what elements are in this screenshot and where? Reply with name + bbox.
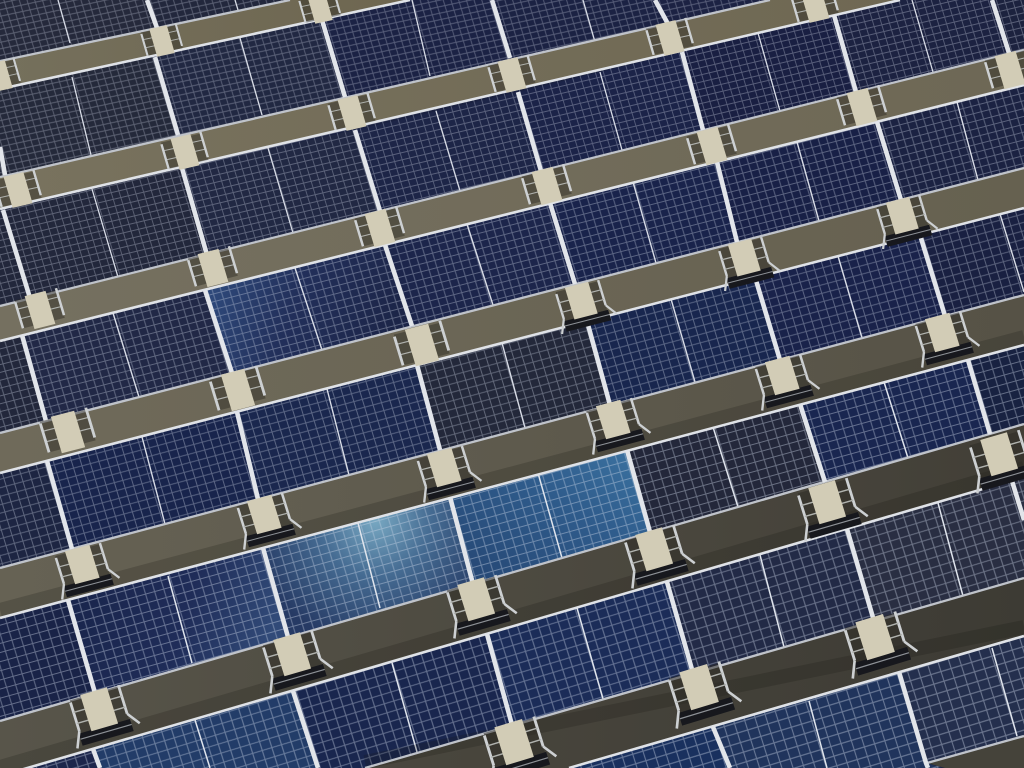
bracket	[686, 124, 738, 168]
bracket	[549, 277, 618, 334]
bracket	[0, 58, 22, 94]
panel r1 c3	[492, 0, 668, 58]
panel r6 c0	[93, 691, 318, 768]
panel r2 c5	[834, 0, 1009, 92]
bracket	[836, 85, 888, 129]
bracket	[187, 246, 239, 290]
bracket	[837, 608, 920, 679]
panel r4 c4	[755, 235, 945, 360]
ground gap G	[927, 736, 1024, 768]
ground gap E	[0, 424, 1024, 768]
panel row 0	[0, 0, 290, 61]
panel r3 c5	[877, 85, 1024, 200]
panel r2 c0	[3, 168, 207, 298]
bracket	[962, 426, 1024, 493]
panel r0 left	[0, 0, 157, 61]
bracket	[161, 132, 209, 172]
bracket	[521, 164, 573, 208]
panel r6 c2	[487, 582, 693, 725]
bracket	[791, 0, 839, 25]
bracket	[328, 93, 376, 133]
panel r5 c5	[968, 345, 1024, 434]
panel row 2	[0, 0, 1024, 306]
bracket	[49, 540, 121, 600]
panel row 4	[0, 208, 1024, 568]
ground gap D	[0, 295, 1024, 618]
panel r7 left	[571, 727, 730, 768]
panel r5 c0	[68, 548, 288, 693]
cell split lines r2	[92, 0, 933, 277]
ground gap T	[0, 0, 410, 89]
panel r0 right	[147, 0, 290, 28]
bracket	[580, 395, 652, 455]
panel r2 c3	[518, 52, 703, 171]
panel r5 left	[0, 600, 95, 721]
bracket	[14, 288, 66, 332]
bracket	[298, 0, 342, 26]
bracket	[411, 443, 483, 503]
panel r2 c6	[992, 0, 1024, 53]
bracket	[354, 206, 406, 250]
panel r4 c0	[47, 412, 258, 549]
ground gap A	[0, 0, 900, 209]
bracket	[0, 170, 42, 210]
panel r4 c2	[417, 321, 610, 450]
bracket	[255, 626, 335, 693]
bracket row F	[476, 608, 920, 768]
bracket	[749, 351, 821, 411]
panel r4 left	[0, 461, 72, 568]
panel r4 c1	[237, 365, 440, 499]
ground gap F	[365, 578, 1024, 768]
bracket	[870, 192, 939, 249]
panel r1 c4	[655, 0, 770, 24]
panel r3 c3	[550, 162, 737, 284]
bracket	[439, 572, 519, 638]
panel r7 c3	[713, 672, 942, 768]
bracket	[661, 658, 744, 729]
panel r5 c3	[627, 404, 825, 532]
bracket	[909, 308, 981, 368]
bracket row A	[0, 0, 839, 210]
panel r2 c2	[355, 92, 541, 211]
panel r2 c1	[182, 130, 380, 255]
panel r1 c1	[155, 20, 345, 135]
cell split lines r4	[142, 214, 1024, 524]
bracket row E	[62, 426, 1024, 748]
bracket row T	[0, 0, 342, 94]
ground gap C	[0, 168, 1024, 473]
panel r3 left	[0, 335, 46, 433]
cell split lines r6	[195, 503, 963, 768]
cell split lines r5	[168, 382, 908, 663]
panel r6 c3	[667, 529, 874, 673]
panel row 6	[0, 477, 1024, 768]
cell split lines r1	[72, 0, 595, 155]
panel r3 c0	[22, 290, 232, 421]
panel r3 c1 lit	[205, 245, 412, 373]
bracket	[646, 18, 694, 58]
bracket	[488, 55, 536, 95]
cell grid r4	[0, 208, 1024, 568]
bracket	[231, 490, 303, 550]
shadows on ground under panels	[0, 337, 1024, 767]
bracket row C	[39, 192, 939, 456]
panel r6 c1	[293, 634, 512, 768]
panel r5 c1 bright	[263, 497, 473, 637]
panel row 3	[0, 85, 1024, 433]
cell split lines r3	[113, 102, 978, 397]
cell grid r0	[0, 0, 290, 61]
cell split lines r7	[809, 648, 1017, 768]
bracket row B	[14, 48, 1024, 332]
panel row 1	[0, 0, 770, 177]
panel r6 left	[30, 749, 100, 768]
panel r5 c4	[800, 360, 990, 482]
panel r4 c3	[587, 277, 780, 405]
cell grid r2	[0, 0, 1024, 306]
bracket	[476, 713, 558, 768]
bracket	[712, 234, 781, 291]
bracket row D	[49, 308, 981, 600]
panel r2 c4	[682, 15, 856, 130]
panel r6 c4	[847, 478, 1024, 621]
ground gap B	[0, 50, 1024, 341]
bracket	[617, 522, 697, 588]
panel r3 c2	[385, 203, 575, 326]
panel r3 c4	[717, 122, 901, 242]
bracket	[790, 474, 870, 541]
panel row 5	[0, 345, 1024, 721]
panel r4 c5	[920, 208, 1024, 316]
bracket	[140, 23, 184, 59]
cell split line r0	[58, 0, 238, 43]
cell grid r3	[0, 85, 1024, 433]
bracket	[393, 321, 451, 369]
panel r7 c4	[899, 636, 1024, 763]
panel row 7	[569, 636, 1024, 768]
panel r1 c0	[0, 57, 178, 177]
bracket	[984, 48, 1024, 92]
cell grid r1	[0, 0, 770, 177]
panel r2 left	[0, 210, 30, 306]
bracket	[39, 408, 97, 456]
bracket	[209, 366, 267, 414]
panel r1 c2	[322, 0, 510, 97]
cell grid r6	[0, 477, 1024, 768]
cell grid r5	[0, 345, 1024, 721]
panel r5 c2 bright	[450, 450, 650, 584]
bracket	[62, 682, 142, 748]
cell grid r7	[569, 636, 1024, 768]
